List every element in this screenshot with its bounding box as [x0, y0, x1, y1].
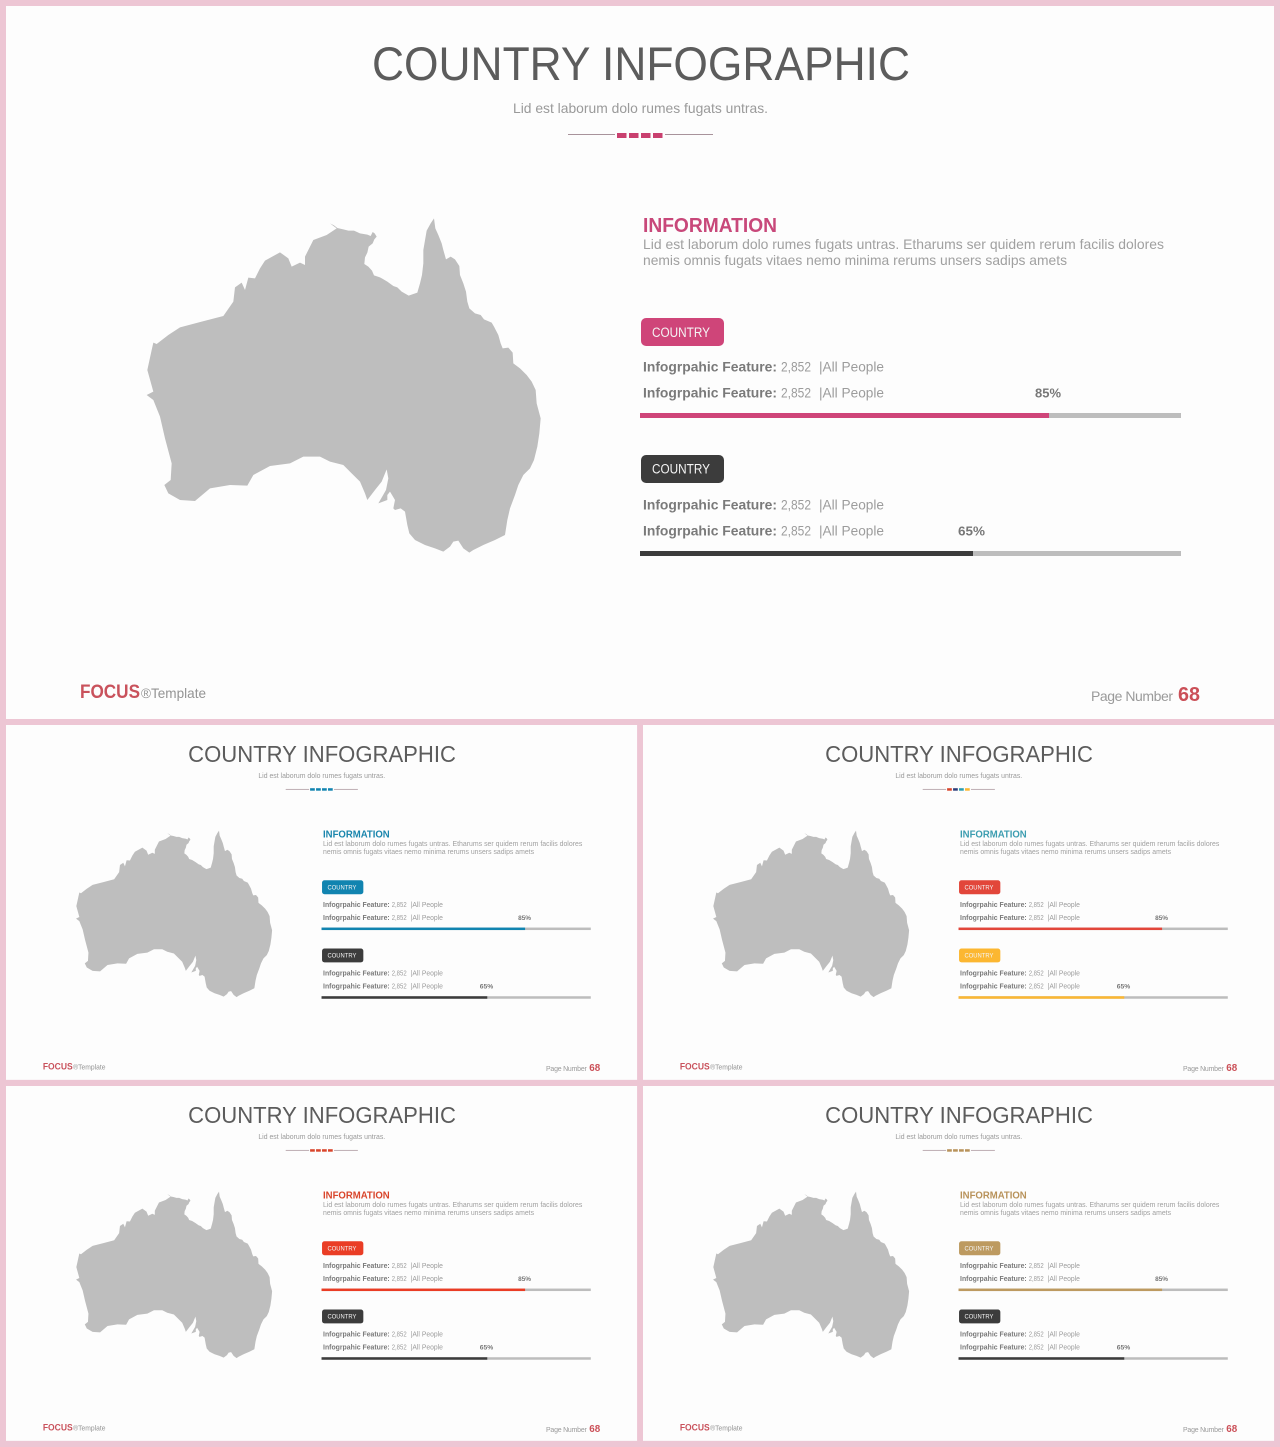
country group 1: 2,852	[392, 1263, 407, 1270]
information block: Lid est laborum dolo rumes fugats untras. Etharums ser quidem rerum facilis dolores	[323, 1202, 583, 1209]
country group 2	[959, 948, 1228, 999]
country group 2: 2,852	[392, 1332, 407, 1339]
country group 2: |All People	[1048, 984, 1080, 991]
country group 2: 2,852	[781, 522, 811, 538]
country group 1	[959, 880, 1228, 930]
country group 1: Infogrpahic Feature:	[960, 1276, 1027, 1283]
footer brand: FOCUS	[680, 1061, 710, 1072]
information block: INFORMATION	[323, 829, 390, 840]
title: COUNTRY INFOGRAPHIC	[188, 741, 456, 767]
country group 1: 85%	[518, 1276, 531, 1283]
footer brand	[43, 1061, 106, 1072]
country group 1	[322, 1241, 591, 1291]
information block	[960, 1190, 1220, 1217]
country group 2: |All People	[819, 522, 884, 538]
country group 1: COUNTRY	[328, 1246, 357, 1253]
country group 1	[640, 318, 1181, 418]
country group 2: 2,852	[392, 984, 407, 991]
country group 1: Infogrpahic Feature:	[323, 902, 390, 909]
map: Australia	[713, 831, 909, 997]
country group 2: 65%	[480, 1345, 493, 1352]
country group 1: |All People	[411, 915, 443, 922]
country group 2: 65%	[480, 984, 493, 991]
information block: INFORMATION	[323, 1190, 390, 1201]
page number: Page Number	[1091, 688, 1173, 704]
information block	[323, 1190, 583, 1217]
country group 2: 65%	[1117, 984, 1130, 991]
country group 1: Infogrpahic Feature:	[643, 358, 777, 374]
country group 2: |All People	[411, 984, 443, 991]
panel: slide variant, tan theme	[643, 1086, 1274, 1441]
country group 2: 65%	[958, 524, 985, 538]
title divider	[286, 788, 358, 791]
information block: INFORMATION	[643, 215, 777, 237]
footer brand	[680, 1061, 743, 1072]
country group 2: |All People	[411, 1332, 443, 1339]
information block: nemis omnis fugats vitaes nemo minima rerums unsers sadips amets	[960, 849, 1172, 856]
country group 2: 2,852	[1029, 1332, 1044, 1339]
footer brand	[43, 1422, 106, 1433]
country group 2: 65%	[1117, 1345, 1130, 1352]
country group 2: COUNTRY	[328, 953, 357, 960]
title divider	[286, 1149, 358, 1152]
country group 1: |All People	[411, 1263, 443, 1270]
footer brand: FOCUS	[80, 682, 140, 703]
subtitle: Lid est laborum dolo rumes fugats untras.	[895, 1134, 1022, 1141]
country group 2: Infogrpahic Feature:	[323, 1345, 390, 1352]
page number	[546, 1424, 601, 1435]
country group 1: COUNTRY	[965, 885, 994, 892]
information block: nemis omnis fugats vitaes nemo minima rerums unsers sadips amets	[643, 252, 1067, 268]
footer brand: ®Template	[141, 685, 206, 701]
country group 1: COUNTRY	[652, 325, 710, 340]
panel: slide variant, blue theme	[6, 725, 637, 1080]
country group 2: Infogrpahic Feature:	[960, 1332, 1027, 1339]
country group 1: 85%	[518, 915, 531, 922]
country group 2: COUNTRY	[965, 1314, 994, 1321]
country group 2: |All People	[1048, 1345, 1080, 1352]
country group 1: 2,852	[1029, 915, 1044, 922]
country group 2: |All People	[411, 1345, 443, 1352]
country group 2: Infogrpahic Feature:	[960, 984, 1027, 991]
country group 2: Infogrpahic Feature:	[960, 971, 1027, 978]
page number: 68	[589, 1424, 601, 1435]
information block: Lid est laborum dolo rumes fugats untras. Etharums ser quidem rerum facilis dolores	[643, 236, 1164, 252]
country group 2: Infogrpahic Feature:	[960, 1345, 1027, 1352]
country group 2	[322, 948, 591, 999]
title divider	[923, 1149, 995, 1152]
information block	[323, 829, 583, 856]
country group 1: Infogrpahic Feature:	[323, 915, 390, 922]
country group 2: COUNTRY	[652, 462, 710, 476]
map: Australia	[76, 1192, 272, 1358]
country group 2: 2,852	[1029, 971, 1044, 978]
country group 2	[322, 1309, 591, 1360]
country group 2: |All People	[1048, 1332, 1080, 1339]
country group 2: Infogrpahic Feature:	[643, 522, 777, 538]
country group 1: Infogrpahic Feature:	[960, 902, 1027, 909]
country group 2: Infogrpahic Feature:	[643, 496, 777, 512]
page number: 68	[1226, 1063, 1238, 1074]
country group 1: Infogrpahic Feature:	[643, 384, 777, 400]
country group 1: Infogrpahic Feature:	[323, 1263, 390, 1270]
country group 2: COUNTRY	[328, 1314, 357, 1321]
country group 2: COUNTRY	[965, 953, 994, 960]
country group 2: |All People	[819, 496, 884, 512]
country group 1: 2,852	[392, 915, 407, 922]
country group 1: 2,852	[1029, 902, 1044, 909]
country group 1: 2,852	[392, 902, 407, 909]
page number: Page Number	[1183, 1066, 1224, 1073]
country group 1: Infogrpahic Feature:	[960, 915, 1027, 922]
country group 2: Infogrpahic Feature:	[323, 971, 390, 978]
information block: Lid est laborum dolo rumes fugats untras. Etharums ser quidem rerum facilis dolores	[960, 1202, 1220, 1209]
country group 1: |All People	[819, 358, 884, 374]
country group 2	[959, 1309, 1228, 1360]
page number: Page Number	[546, 1427, 587, 1434]
subtitle: Lid est laborum dolo rumes fugats untras.	[513, 100, 768, 116]
country group 2	[640, 455, 1181, 556]
information block	[960, 829, 1220, 856]
title divider	[923, 788, 995, 791]
page number: Page Number	[1183, 1427, 1224, 1434]
country group 1: 85%	[1155, 915, 1168, 922]
country group 1	[322, 880, 591, 930]
country group 2: Infogrpahic Feature:	[323, 984, 390, 991]
footer brand: ®Template	[710, 1424, 743, 1432]
page number	[1091, 684, 1200, 706]
page number: 68	[1178, 684, 1200, 706]
country group 1: 85%	[1155, 1276, 1168, 1283]
subtitle: Lid est laborum dolo rumes fugats untras.	[258, 773, 385, 780]
country group 1: |All People	[411, 1276, 443, 1283]
information block	[643, 215, 1164, 268]
country group 1: COUNTRY	[328, 885, 357, 892]
country group 2: 2,852	[1029, 984, 1044, 991]
information block: nemis omnis fugats vitaes nemo minima rerums unsers sadips amets	[323, 849, 535, 856]
country group 2: Infogrpahic Feature:	[323, 1332, 390, 1339]
footer brand: FOCUS	[43, 1061, 73, 1072]
page number	[1183, 1063, 1238, 1074]
page number: 68	[1226, 1424, 1238, 1435]
footer brand: FOCUS	[43, 1422, 73, 1433]
page number: 68	[589, 1063, 601, 1074]
footer brand: ®Template	[73, 1424, 106, 1432]
country group 1: 2,852	[781, 384, 811, 400]
footer brand: FOCUS	[680, 1422, 710, 1433]
country group 1: |All People	[1048, 1263, 1080, 1270]
information block: nemis omnis fugats vitaes nemo minima rerums unsers sadips amets	[960, 1210, 1172, 1217]
country group 2: 2,852	[392, 971, 407, 978]
information block: INFORMATION	[960, 829, 1027, 840]
country group 1: Infogrpahic Feature:	[960, 1263, 1027, 1270]
country group 1: 2,852	[781, 358, 811, 374]
subtitle: Lid est laborum dolo rumes fugats untras.	[258, 1134, 385, 1141]
country group 2: 2,852	[392, 1345, 407, 1352]
country group 2: 2,852	[781, 496, 811, 512]
country group 1: |All People	[1048, 902, 1080, 909]
information block: INFORMATION	[960, 1190, 1027, 1201]
panel: main slide, pink theme	[6, 6, 1274, 719]
map: Australia	[713, 1192, 909, 1358]
country group 1: |All People	[411, 902, 443, 909]
page number	[546, 1063, 601, 1074]
title: COUNTRY INFOGRAPHIC	[372, 37, 910, 90]
country group 1: 2,852	[1029, 1276, 1044, 1283]
footer brand	[80, 682, 206, 703]
subtitle: Lid est laborum dolo rumes fugats untras.	[895, 773, 1022, 780]
country group 2: 2,852	[1029, 1345, 1044, 1352]
page number	[1183, 1424, 1238, 1435]
country group 1	[959, 1241, 1228, 1291]
country group 1: 85%	[1035, 386, 1061, 400]
country group 1: COUNTRY	[965, 1246, 994, 1253]
country group 2: |All People	[411, 971, 443, 978]
country group 2: |All People	[1048, 971, 1080, 978]
country group 1: |All People	[1048, 915, 1080, 922]
title: COUNTRY INFOGRAPHIC	[825, 1102, 1093, 1128]
map: Australia	[76, 831, 272, 997]
information block: nemis omnis fugats vitaes nemo minima rerums unsers sadips amets	[323, 1210, 535, 1217]
title: COUNTRY INFOGRAPHIC	[825, 741, 1093, 767]
information block: Lid est laborum dolo rumes fugats untras. Etharums ser quidem rerum facilis dolores	[323, 841, 583, 848]
country group 1: |All People	[1048, 1276, 1080, 1283]
country group 1: |All People	[819, 384, 884, 400]
information block: Lid est laborum dolo rumes fugats untras. Etharums ser quidem rerum facilis dolores	[960, 841, 1220, 848]
country group 1: Infogrpahic Feature:	[323, 1276, 390, 1283]
footer brand: ®Template	[710, 1063, 743, 1071]
footer brand	[680, 1422, 743, 1433]
title: COUNTRY INFOGRAPHIC	[188, 1102, 456, 1128]
page number: Page Number	[546, 1066, 587, 1073]
map: Australia	[147, 218, 541, 553]
title divider	[568, 133, 713, 138]
panel: slide variant, orange-red theme	[6, 1086, 637, 1441]
panel: slide variant, red and yellow theme	[643, 725, 1274, 1080]
country group 1: 2,852	[1029, 1263, 1044, 1270]
country group 1: 2,852	[392, 1276, 407, 1283]
footer brand: ®Template	[73, 1063, 106, 1071]
